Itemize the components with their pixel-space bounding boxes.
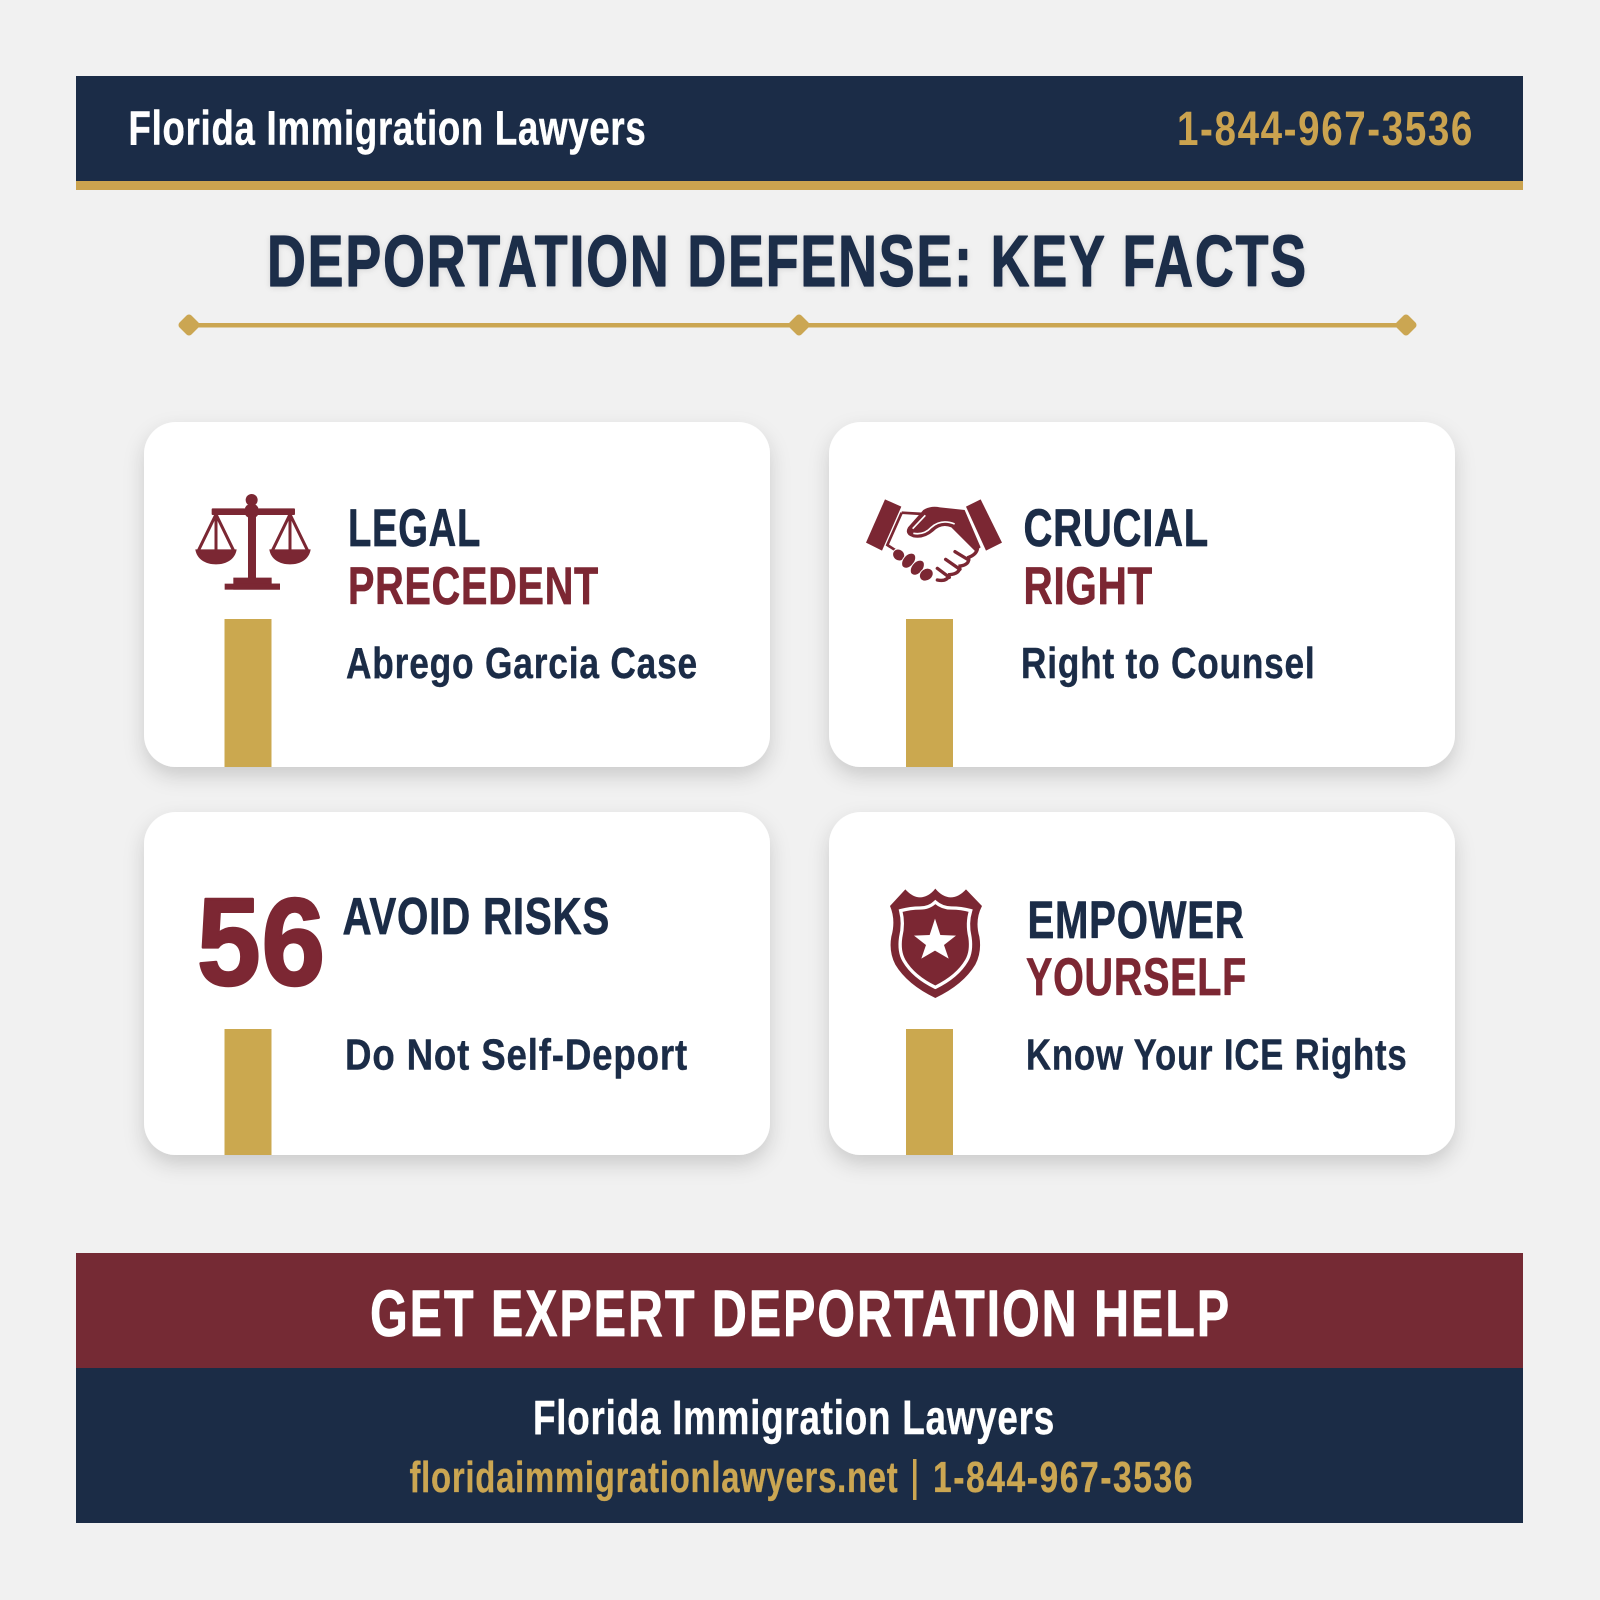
header bar (76, 76, 1523, 190)
gold bar (224, 619, 272, 767)
header firm name: Florida Immigration Lawyers (128, 102, 646, 156)
fact text: Know Your ICE Rights (1026, 1030, 1408, 1080)
fact text: Do Not Self-Deport (345, 1030, 688, 1080)
heading: crucial: CRUCIAL (1024, 499, 1209, 558)
heading: right: RIGHT (1024, 557, 1153, 616)
card background (829, 422, 1455, 767)
footer website: floridaimmigrationlawyers.net (410, 1453, 898, 1502)
gold bar (906, 1029, 953, 1155)
footer firm name: Florida Immigration Lawyers (533, 1392, 1055, 1445)
panel: empower yourself (829, 812, 1455, 1155)
fact text: Abrego Garcia Case (346, 639, 698, 688)
gold bar (224, 1029, 272, 1155)
footer phone number: 1-844-967-3536 (933, 1453, 1194, 1502)
panel: avoid risks (144, 812, 770, 1155)
footer contact block (76, 1368, 1523, 1523)
banner heading: GET EXPERT DEPORTATION HELP (370, 1276, 1231, 1350)
header navy band (76, 76, 1523, 181)
big number 56: 56 (197, 874, 326, 1012)
card background (144, 422, 770, 767)
header phone number: 1-844-967-3536 (1177, 103, 1474, 156)
panel: legal precedent (144, 422, 770, 767)
heading: legal: LEGAL (348, 499, 481, 558)
panel: crucial right (829, 422, 1455, 767)
card background (144, 812, 770, 1155)
fact text: Right to Counsel (1021, 639, 1316, 688)
heading: empower: EMPOWER (1028, 891, 1244, 950)
heading: yourself: YOURSELF (1026, 948, 1247, 1007)
title divider with diamonds (182, 318, 1413, 332)
heading: precedent: PRECEDENT (348, 557, 599, 616)
header gold rule (76, 181, 1523, 190)
footer navy band (76, 1368, 1523, 1523)
call to action banner (76, 1253, 1523, 1368)
footer separator (913, 1459, 916, 1500)
card background (829, 812, 1455, 1155)
banner red band (76, 1253, 1523, 1368)
icon: handshake (866, 499, 1002, 584)
icon: scales of justice (195, 494, 311, 590)
icon: police badge shield (890, 889, 982, 998)
heading: avoid risks: AVOID RISKS (342, 888, 610, 946)
gold bar (906, 619, 953, 767)
